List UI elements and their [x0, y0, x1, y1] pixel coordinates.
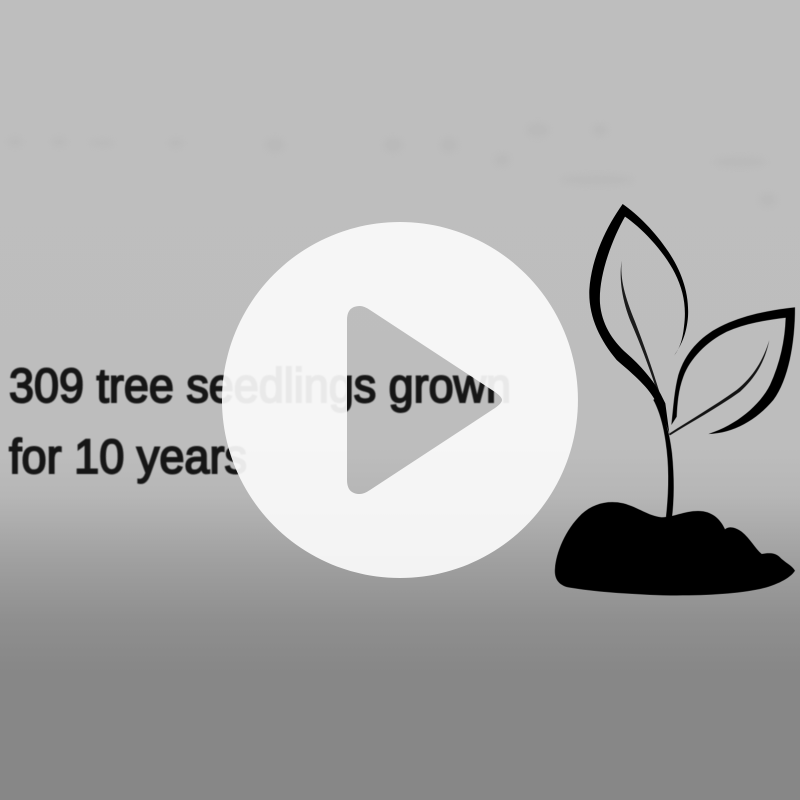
icon: seedling in soil	[555, 204, 795, 595]
caption line 2: for 10 years	[9, 431, 247, 484]
play button	[222, 222, 578, 578]
soil mound	[555, 502, 795, 595]
caption line 1: 309 tree seedlings grown	[9, 360, 511, 413]
caption: seedlings text	[9, 360, 511, 484]
left leaf vein	[621, 261, 659, 392]
right leaf vein	[669, 340, 769, 435]
play circle with triangular cutout	[222, 222, 578, 578]
left leaf outline	[589, 204, 688, 433]
faded text remnants at top	[8, 123, 776, 206]
stem	[653, 398, 674, 520]
right leaf outline	[671, 307, 795, 434]
